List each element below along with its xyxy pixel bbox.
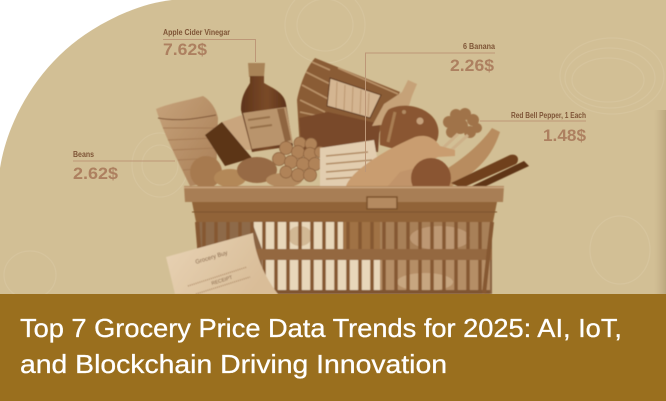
callout: 6 banana: 6 Banana xyxy=(463,42,495,51)
banana bunch base xyxy=(388,168,416,186)
callout: beans: 2.62$ xyxy=(73,164,119,183)
red bell pepper xyxy=(380,106,439,150)
callout: apple cider vinegar xyxy=(163,28,256,62)
tomato xyxy=(411,158,451,198)
basket bars xyxy=(196,222,492,294)
title band xyxy=(0,294,666,401)
leafy greens xyxy=(441,108,482,153)
dark cucumbers xyxy=(451,155,529,188)
title: and Blockchain Driving Innovation xyxy=(20,349,447,379)
grocery basket with food xyxy=(156,58,529,294)
bread and pastries xyxy=(190,156,302,188)
callout: red bell pepper xyxy=(480,111,587,145)
callout: apple cider vinegar: 7.62$ xyxy=(163,40,208,59)
callout: red bell pepper: 1.48$ xyxy=(543,126,587,145)
basket interior xyxy=(197,186,492,294)
basket rim xyxy=(184,186,504,222)
tall paper packet xyxy=(222,115,258,150)
tin box xyxy=(205,122,252,166)
grocery receipt: RECEIPT xyxy=(211,275,233,287)
small glass bottle xyxy=(372,80,417,126)
sack of beans xyxy=(156,96,218,186)
cluster of grapes xyxy=(272,137,326,182)
callout: 6 banana: 2.26$ xyxy=(450,56,495,75)
second banana xyxy=(433,128,500,186)
woven crate with label xyxy=(297,58,400,152)
grocery receipt xyxy=(166,233,278,294)
callout: beans xyxy=(73,150,175,183)
callout: beans: Beans xyxy=(73,150,94,159)
callout: 6 banana xyxy=(366,42,495,172)
panel: tan background with curved corner xyxy=(0,0,666,299)
basket contents seen through bars xyxy=(200,222,490,294)
title xyxy=(20,313,622,379)
callout: red bell pepper: Red Bell Pepper, 1 Each xyxy=(511,111,586,120)
title: Top 7 Grocery Price Data Trends for 2025: AI, IoT, xyxy=(20,313,622,343)
paper packet xyxy=(320,140,382,186)
icon: vinegar bottle xyxy=(241,63,293,152)
big banana xyxy=(346,136,455,186)
grocery receipt: Grocery Buy xyxy=(195,250,228,266)
callout: apple cider vinegar: Apple Cider Vinegar xyxy=(163,28,230,37)
